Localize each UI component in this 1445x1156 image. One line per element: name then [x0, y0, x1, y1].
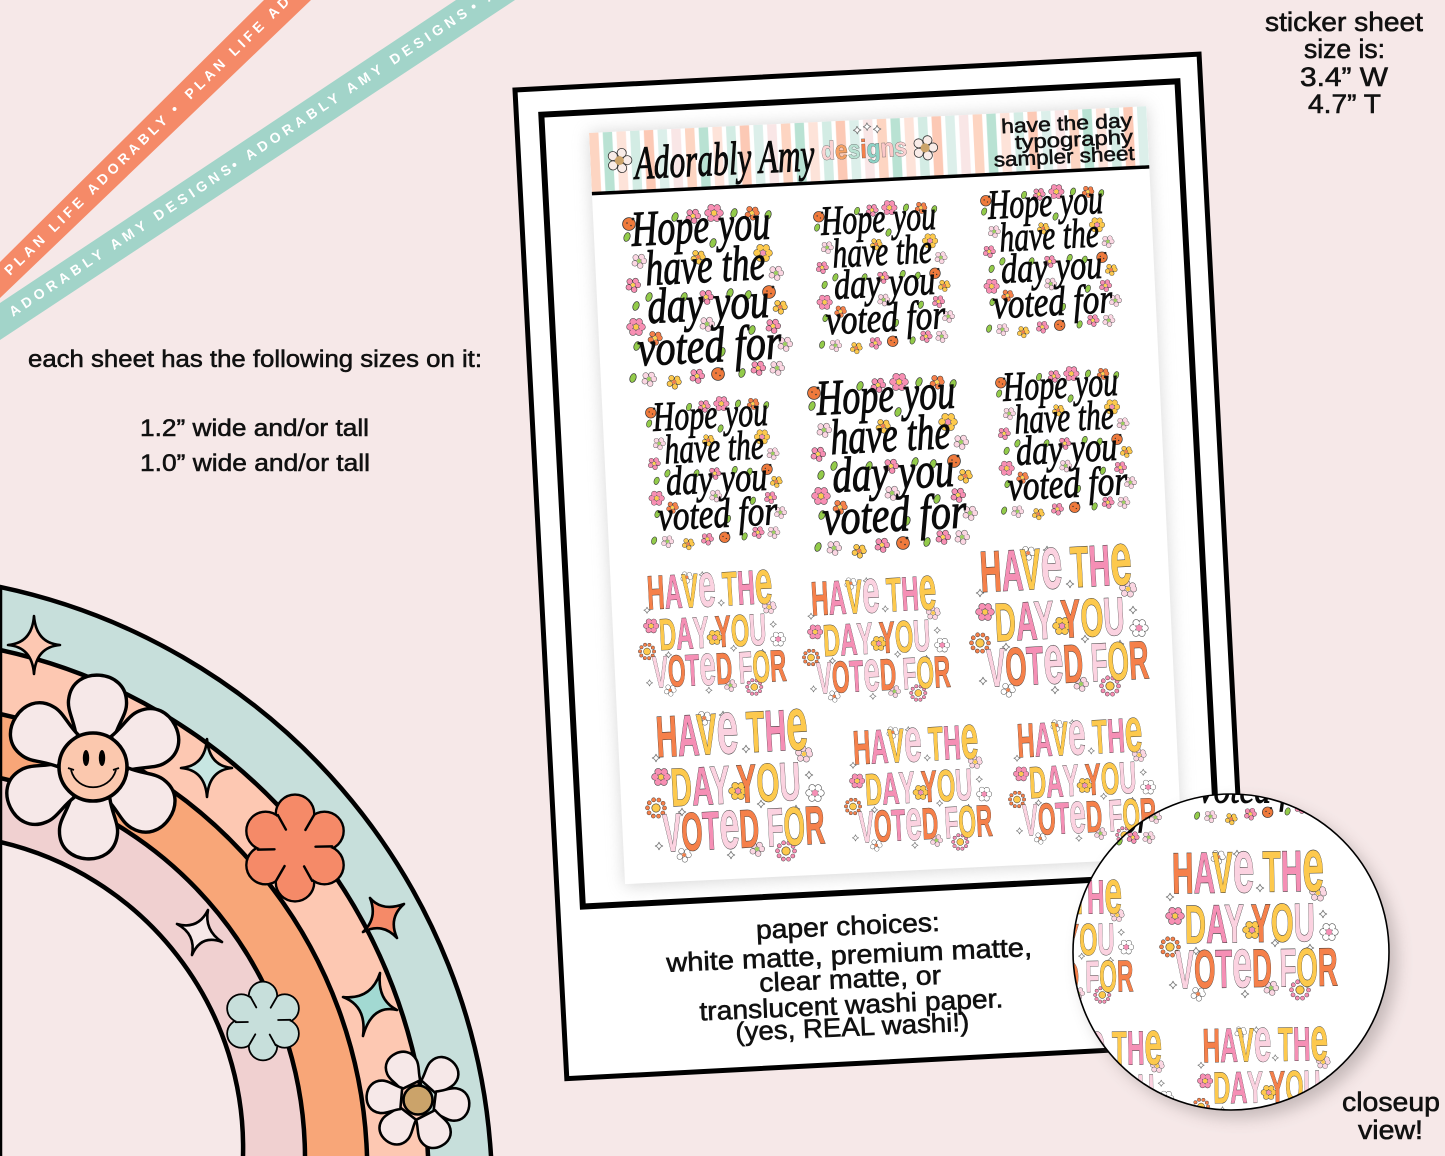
text: closeup view: view!: [1358, 1115, 1423, 1145]
sticker: hope you have the day 1: Hope you: [629, 194, 771, 257]
sticker: hope you have the day 4: voted for: [657, 487, 779, 539]
text: sticker sheet size: sticker sheet: [1265, 7, 1424, 37]
closeup lens: [1072, 793, 1404, 1126]
icon: white flower: [365, 1047, 471, 1153]
sticker: hope you have the day 6: day you: [1015, 423, 1118, 474]
text: sheet title: typography: [1014, 126, 1133, 154]
lens sticker: large have the day: DAY YOU: [1184, 893, 1315, 955]
sticker: hope you have the day 6: voted for: [1007, 457, 1129, 509]
sticker: have the day you voted for 4: DAY YOU: [669, 752, 802, 818]
ribbon: adorably amy designs: •: [228, 157, 241, 173]
icon: teal star: [343, 973, 397, 1036]
text: sticker sheet size: 4.7” T: [1308, 89, 1381, 119]
sticker: hope you have the day 5: voted for: [821, 482, 968, 546]
sticker: hope you have the day 4: have the: [663, 421, 765, 473]
ribbon: plan life adorably: PLAN LIFE ADORABLY: [1, 112, 171, 278]
icon: header flower left: [611, 152, 628, 169]
text: sheet title: have the day: [1001, 110, 1133, 138]
sticker: hope you have the day 2: Hope you: [819, 192, 937, 244]
lens sticker: left: HAVe THe: [996, 858, 1123, 929]
sticker: hope you have the day 4: day you: [665, 453, 768, 504]
lens sticker: left: VOTeD FOR: [999, 940, 1134, 1007]
sticker: hope you have the day 1: day you: [646, 272, 771, 334]
sticker: hope you have the day 2: day you: [833, 257, 936, 308]
ribbon: plan life adorably: •: [167, 101, 182, 116]
sticker: have the day you voted for 6: HAVe THe: [1015, 696, 1144, 771]
sticker: have the day you voted for 3: VOTeD FOR: [985, 614, 1151, 702]
text: sheet title: sampler sheet: [993, 143, 1136, 172]
sticker: hope you have the day 5: day you: [831, 441, 956, 503]
text: Adorably Amy logo: Adorably Amy: [631, 129, 816, 190]
sticker: hope you have the day 3: Hope you: [986, 176, 1104, 228]
sticker: have the day you voted for 2: DAY YOU: [822, 612, 932, 666]
text: sizes on each sheet: [28, 346, 482, 477]
icon: header flower right: [917, 140, 933, 156]
lens sticker: lower right: HAVe THe: [1202, 1005, 1329, 1076]
lens sticker: top left: [1117, 812, 1162, 846]
sticker: hope you have the day 2: [813, 192, 952, 352]
sticker: hope you have the day 3: [980, 176, 1119, 336]
panel: sticker sheet frame: [515, 54, 1251, 1079]
text: sticker sheet size: 3.4” W: [1300, 62, 1388, 92]
sticker: have the day you voted for 6: [1010, 695, 1158, 849]
lens sticker: lower right: [1193, 1026, 1330, 1110]
sticker: have the day you voted for 2: [804, 553, 952, 707]
sticker: have the day you voted for 4: [648, 680, 827, 867]
sticker: have the day you voted for 1: HAVe THe: [645, 548, 774, 623]
panel: sticker sheet paper: [589, 106, 1183, 886]
text: paper choices: (yes, REAL washi!): [735, 1007, 970, 1047]
text: designs logo: designs: [820, 132, 908, 166]
lens sticker: large have the day: [1159, 850, 1338, 1002]
sticker: hope you have the day 4: Hope you: [651, 388, 769, 440]
text: paper choices: clear matte, or: [759, 960, 942, 998]
ribbon: adorably amy designs: [0, 0, 574, 340]
lens sticker: lower left: HAVe THe: [1036, 1009, 1163, 1080]
lens sticker: lower left: [1096, 1030, 1174, 1098]
sticker: have the day you voted for 1: VOTeD FOR: [651, 630, 788, 701]
sticker: hope you have the day 2: voted for: [825, 291, 947, 343]
sticker: have the day you voted for 1: [640, 547, 788, 701]
ribbon: plan life adorably: [0, 0, 351, 298]
ribbon: adorably amy designs: ADORABLY AMY DESIGNS: [242, 5, 470, 163]
sticker: hope you have the day 6: have the: [1013, 391, 1115, 443]
lens sticker: top left: voted for: [1031, 795, 1151, 841]
lens sticker: large have the day: HAVe THe: [1171, 823, 1325, 909]
ribbon: adorably amy designs: ADORABLY AMY DESIGNS: [6, 161, 234, 320]
sticker: have the day you voted for 4: VOTeD FOR: [661, 779, 827, 867]
lens sticker: lower left: DAY YOU: [1047, 1066, 1155, 1117]
text: closeup view: closeup: [1342, 1087, 1440, 1117]
sticker: have the day you voted for 2: VOTeD FOR: [815, 636, 952, 707]
text: paper choices: paper choices:: [755, 907, 940, 945]
sticker: have the day you voted for 4: HAVe THe: [653, 681, 810, 773]
sticker: hope you have the day 5: have the: [829, 403, 952, 465]
lens sticker: large have the day: VOTeD FOR: [1175, 921, 1338, 1003]
sticker: hope you have the day 3: voted for: [992, 275, 1114, 327]
sticker: hope you have the day 6: [995, 358, 1134, 518]
lens sticker: lower right: DAY YOU: [1213, 1062, 1321, 1113]
icon: header sparkles: [853, 122, 881, 134]
sticker: have the day you voted for 1: DAY YOU: [658, 606, 768, 660]
lens sticker: left: [1074, 879, 1134, 1004]
sticker: have the day you voted for 5: VOTeD FOR: [857, 785, 994, 856]
sticker: hope you have the day 1: [623, 193, 790, 387]
lens sticker: top center: voted for: [1199, 765, 1319, 811]
sticker: have the day you voted for 6: VOTeD FOR: [1021, 778, 1158, 849]
sticker: hope you have the day 4: [645, 388, 784, 548]
sticker: hope you have the day 5: Hope you: [814, 363, 956, 426]
icon: coral star: [363, 898, 404, 938]
sticker: hope you have the day 1: voted for: [636, 313, 783, 377]
sticker: hope you have the day 3: day you: [1000, 241, 1103, 292]
text: sheet title: [992, 110, 1136, 172]
text: sizes on each sheet: 1.0” wide and/or tall: [140, 450, 370, 477]
sticker: hope you have the day 1: have the: [644, 234, 767, 296]
lens sticker: top center: [1194, 794, 1304, 826]
text: sticker sheet size: size is:: [1304, 34, 1385, 64]
text: paper choices: white matte, premium matte,: [665, 932, 1033, 978]
text: sizes on each sheet: each sheet has the following sizes on it:: [28, 346, 482, 373]
sticker: have the day you voted for 5: HAVe THe: [851, 703, 980, 778]
icon: mint star: [181, 739, 232, 797]
rainbow with flowers: [0, 587, 491, 1156]
sticker: have the day you voted for 3: DAY YOU: [993, 587, 1126, 653]
sticker: have the day you voted for 3: [972, 515, 1151, 702]
sticker: have the day you voted for 6: DAY YOU: [1028, 754, 1138, 808]
icon: peach star: [8, 616, 60, 674]
icon: smiley daisy: [0, 673, 188, 861]
sticker: hope you have the day 6: Hope you: [1001, 358, 1119, 410]
icon: mint flower: [228, 982, 298, 1060]
text: closeup view: [1342, 1087, 1440, 1145]
icon: coral flower: [248, 796, 342, 900]
sticker: hope you have the day 5: [808, 362, 975, 556]
sticker: have the day you voted for 5: DAY YOU: [864, 761, 974, 815]
sticker: have the day you voted for 3: HAVe THe: [977, 516, 1134, 608]
text: sticker sheet size: [1265, 7, 1424, 119]
sticker: have the day you voted for 5: [846, 702, 994, 856]
rainbow bands: [0, 587, 491, 1156]
text: paper choices: [663, 903, 1036, 1050]
sticker: hope you have the day 2: have the: [831, 225, 933, 277]
sticker: have the day you voted for 2: HAVe THe: [809, 554, 938, 629]
header strip: [589, 106, 1149, 195]
sticker: hope you have the day 3: have the: [998, 209, 1100, 261]
text: paper choices: translucent washi paper.: [699, 983, 1004, 1027]
text: sizes on each sheet: 1.2” wide and/or tall: [140, 415, 369, 442]
lens sticker: left: DAY YOU: [1007, 915, 1115, 966]
icon: white star: [177, 910, 222, 955]
